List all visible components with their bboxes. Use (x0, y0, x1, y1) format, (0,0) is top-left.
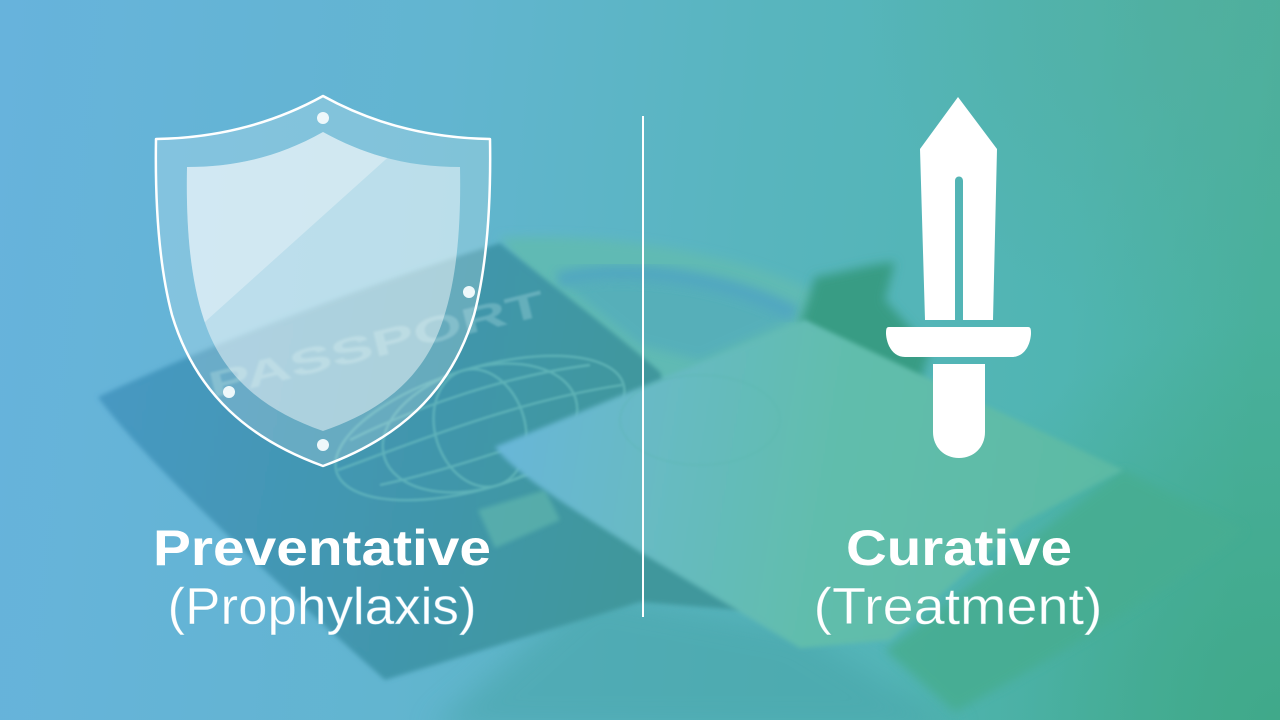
shield inner plate (187, 132, 460, 431)
dark passport cover (98, 243, 740, 680)
shield body (156, 96, 490, 466)
guard (886, 327, 1031, 357)
label: curative (814, 520, 1102, 636)
heading: Curative (846, 520, 1072, 576)
label: preventative (153, 520, 491, 636)
front passport (495, 320, 1123, 648)
stamp inner (565, 278, 795, 360)
heading: Preventative (153, 520, 491, 576)
shadow under front passport (430, 590, 960, 720)
stamp arc (558, 273, 795, 314)
front passport end band (885, 470, 1245, 712)
handle (933, 364, 985, 458)
shield highlight (186, 132, 387, 322)
blade (920, 97, 997, 320)
passport title: PASSPORT (204, 283, 549, 406)
sword icon (886, 97, 1031, 458)
shield icon (156, 96, 490, 466)
passport lower mark (478, 490, 560, 548)
page emblem (620, 375, 780, 465)
shield rivets (223, 112, 475, 451)
dark shadow spot (800, 262, 930, 430)
background photo: blurred passports (98, 237, 1245, 720)
open stamp page behind passports (500, 237, 880, 440)
divider (642, 116, 644, 617)
subheading: (Treatment) (814, 578, 1102, 636)
subheading: (Prophylaxis) (168, 578, 476, 636)
passport globe emblem (319, 327, 641, 529)
